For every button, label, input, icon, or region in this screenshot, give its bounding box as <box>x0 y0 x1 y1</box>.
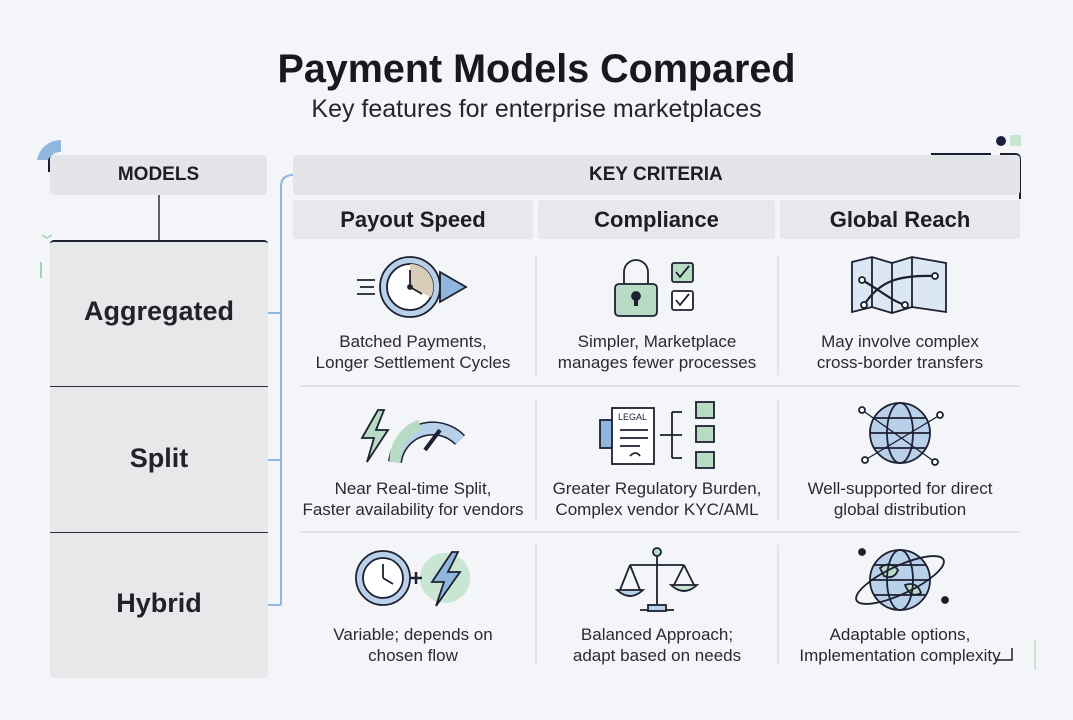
icon: legal document checklist <box>600 402 714 468</box>
column header: Global Reach <box>780 200 1020 239</box>
key criteria header: KEY CRITERIA <box>589 164 723 185</box>
text: Aggregated compliance: manages fewer processes <box>558 353 756 372</box>
text: Aggregated compliance <box>558 332 756 372</box>
model: Aggregated: Aggregated <box>84 296 234 326</box>
icon: lock and checkboxes <box>615 260 693 316</box>
text: Hybrid reach: Adaptable options, <box>830 625 970 644</box>
models header: MODELS <box>118 164 199 185</box>
model: Split: Split <box>130 443 188 473</box>
text: Hybrid compliance: Balanced Approach; <box>581 625 733 644</box>
column header: Payout Speed: Payout Speed <box>340 207 486 232</box>
text: Split payout <box>302 479 524 519</box>
column header: Global Reach: Global Reach <box>830 207 970 232</box>
text: Hybrid payout: chosen flow <box>368 646 458 665</box>
text: Split reach: Well-supported for direct <box>808 479 992 498</box>
title: Payment Models Compared <box>277 47 796 91</box>
icon: lightning gauge <box>362 410 460 462</box>
key criteria header <box>293 155 1020 195</box>
icon: globe network <box>859 403 943 465</box>
models header <box>50 155 267 195</box>
column header: Compliance: Compliance <box>594 207 719 232</box>
models column <box>50 240 268 678</box>
icon: globe orbit <box>851 547 949 613</box>
text: Hybrid reach <box>799 625 1001 665</box>
text: Hybrid reach: Implementation complexity <box>799 646 1001 665</box>
text: Aggregated compliance: Simpler, Marketplace <box>578 332 736 351</box>
text: Split reach: global distribution <box>834 500 966 519</box>
text: Aggregated payout: Batched Payments, <box>339 332 487 351</box>
icon: balance scale <box>617 548 697 611</box>
text: Split reach <box>808 479 992 519</box>
icon: clock arrow <box>357 257 466 317</box>
column header: Compliance <box>538 200 775 239</box>
text: Hybrid compliance: adapt based on needs <box>573 646 741 665</box>
icon: map <box>852 257 946 313</box>
icon: clock plus lightning <box>356 551 470 606</box>
text: Split compliance: Complex vendor KYC/AML <box>555 500 759 519</box>
text: Split compliance: Greater Regulatory Burden, <box>553 479 761 498</box>
text: Hybrid payout <box>333 625 493 665</box>
text: Split payout: Near Real-time Split, <box>335 479 491 498</box>
text: Hybrid compliance <box>573 625 741 665</box>
text: Aggregated reach <box>817 332 983 372</box>
column header: Payout Speed <box>293 200 533 239</box>
text: Split payout: Faster availability for vendors <box>302 500 524 519</box>
text: Aggregated payout <box>316 332 510 372</box>
text: Aggregated reach: May involve complex <box>821 332 979 351</box>
text: Hybrid payout: Variable; depends on <box>333 625 493 644</box>
text: Aggregated reach: cross-border transfers <box>817 353 983 372</box>
text: Split compliance <box>553 479 761 519</box>
model: Hybrid: Hybrid <box>116 588 202 618</box>
text: Aggregated payout: Longer Settlement Cycles <box>316 353 510 372</box>
icon: legal document checklist: LEGAL <box>618 412 647 422</box>
subtitle: Key features for enterprise marketplaces <box>311 95 762 123</box>
